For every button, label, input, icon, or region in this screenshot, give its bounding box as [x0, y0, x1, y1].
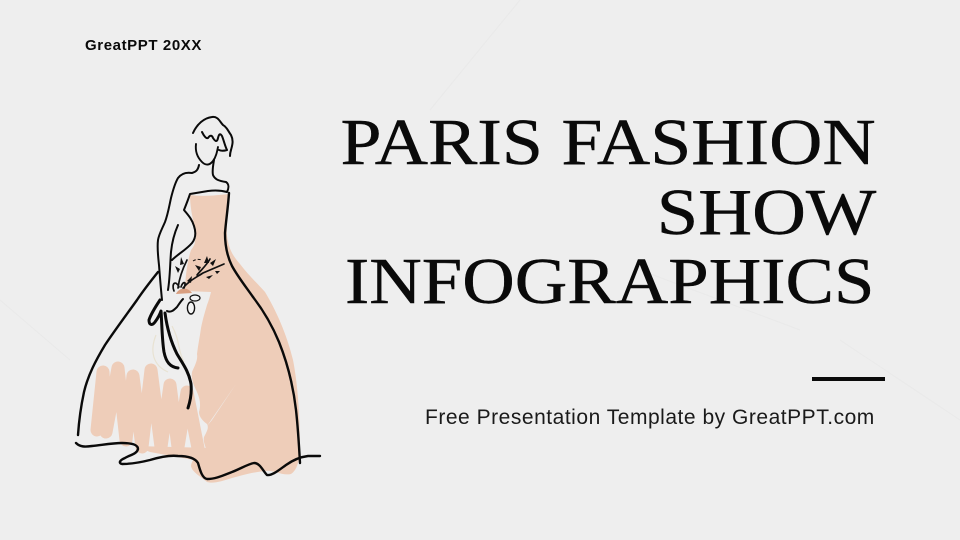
hair	[193, 117, 233, 156]
neck right and bodice	[172, 160, 228, 260]
pale highlight slash	[207, 384, 236, 426]
title	[341, 106, 876, 318]
title: SHOW	[656, 176, 876, 249]
subtitle: Free Presentation Template by GreatPPT.com	[425, 406, 875, 429]
ribbon	[149, 300, 178, 368]
gown left edge	[78, 272, 158, 435]
inner arm	[168, 225, 178, 290]
face	[196, 144, 218, 165]
accent bar	[812, 377, 885, 381]
peach scribble on skirt	[97, 368, 198, 448]
faint ribbon loop	[153, 326, 184, 372]
neck, shoulder and arm	[158, 165, 199, 300]
title: INFOGRAPHICS	[345, 245, 874, 318]
gown hem	[76, 443, 320, 479]
header label: GreatPPT 20XX	[85, 37, 202, 54]
title: PARIS FASHION	[341, 106, 876, 179]
bouquet	[167, 256, 224, 314]
illustration: woman in peach gown	[76, 117, 320, 483]
peach gown colour fill	[185, 194, 300, 483]
gown right edge	[225, 193, 300, 463]
